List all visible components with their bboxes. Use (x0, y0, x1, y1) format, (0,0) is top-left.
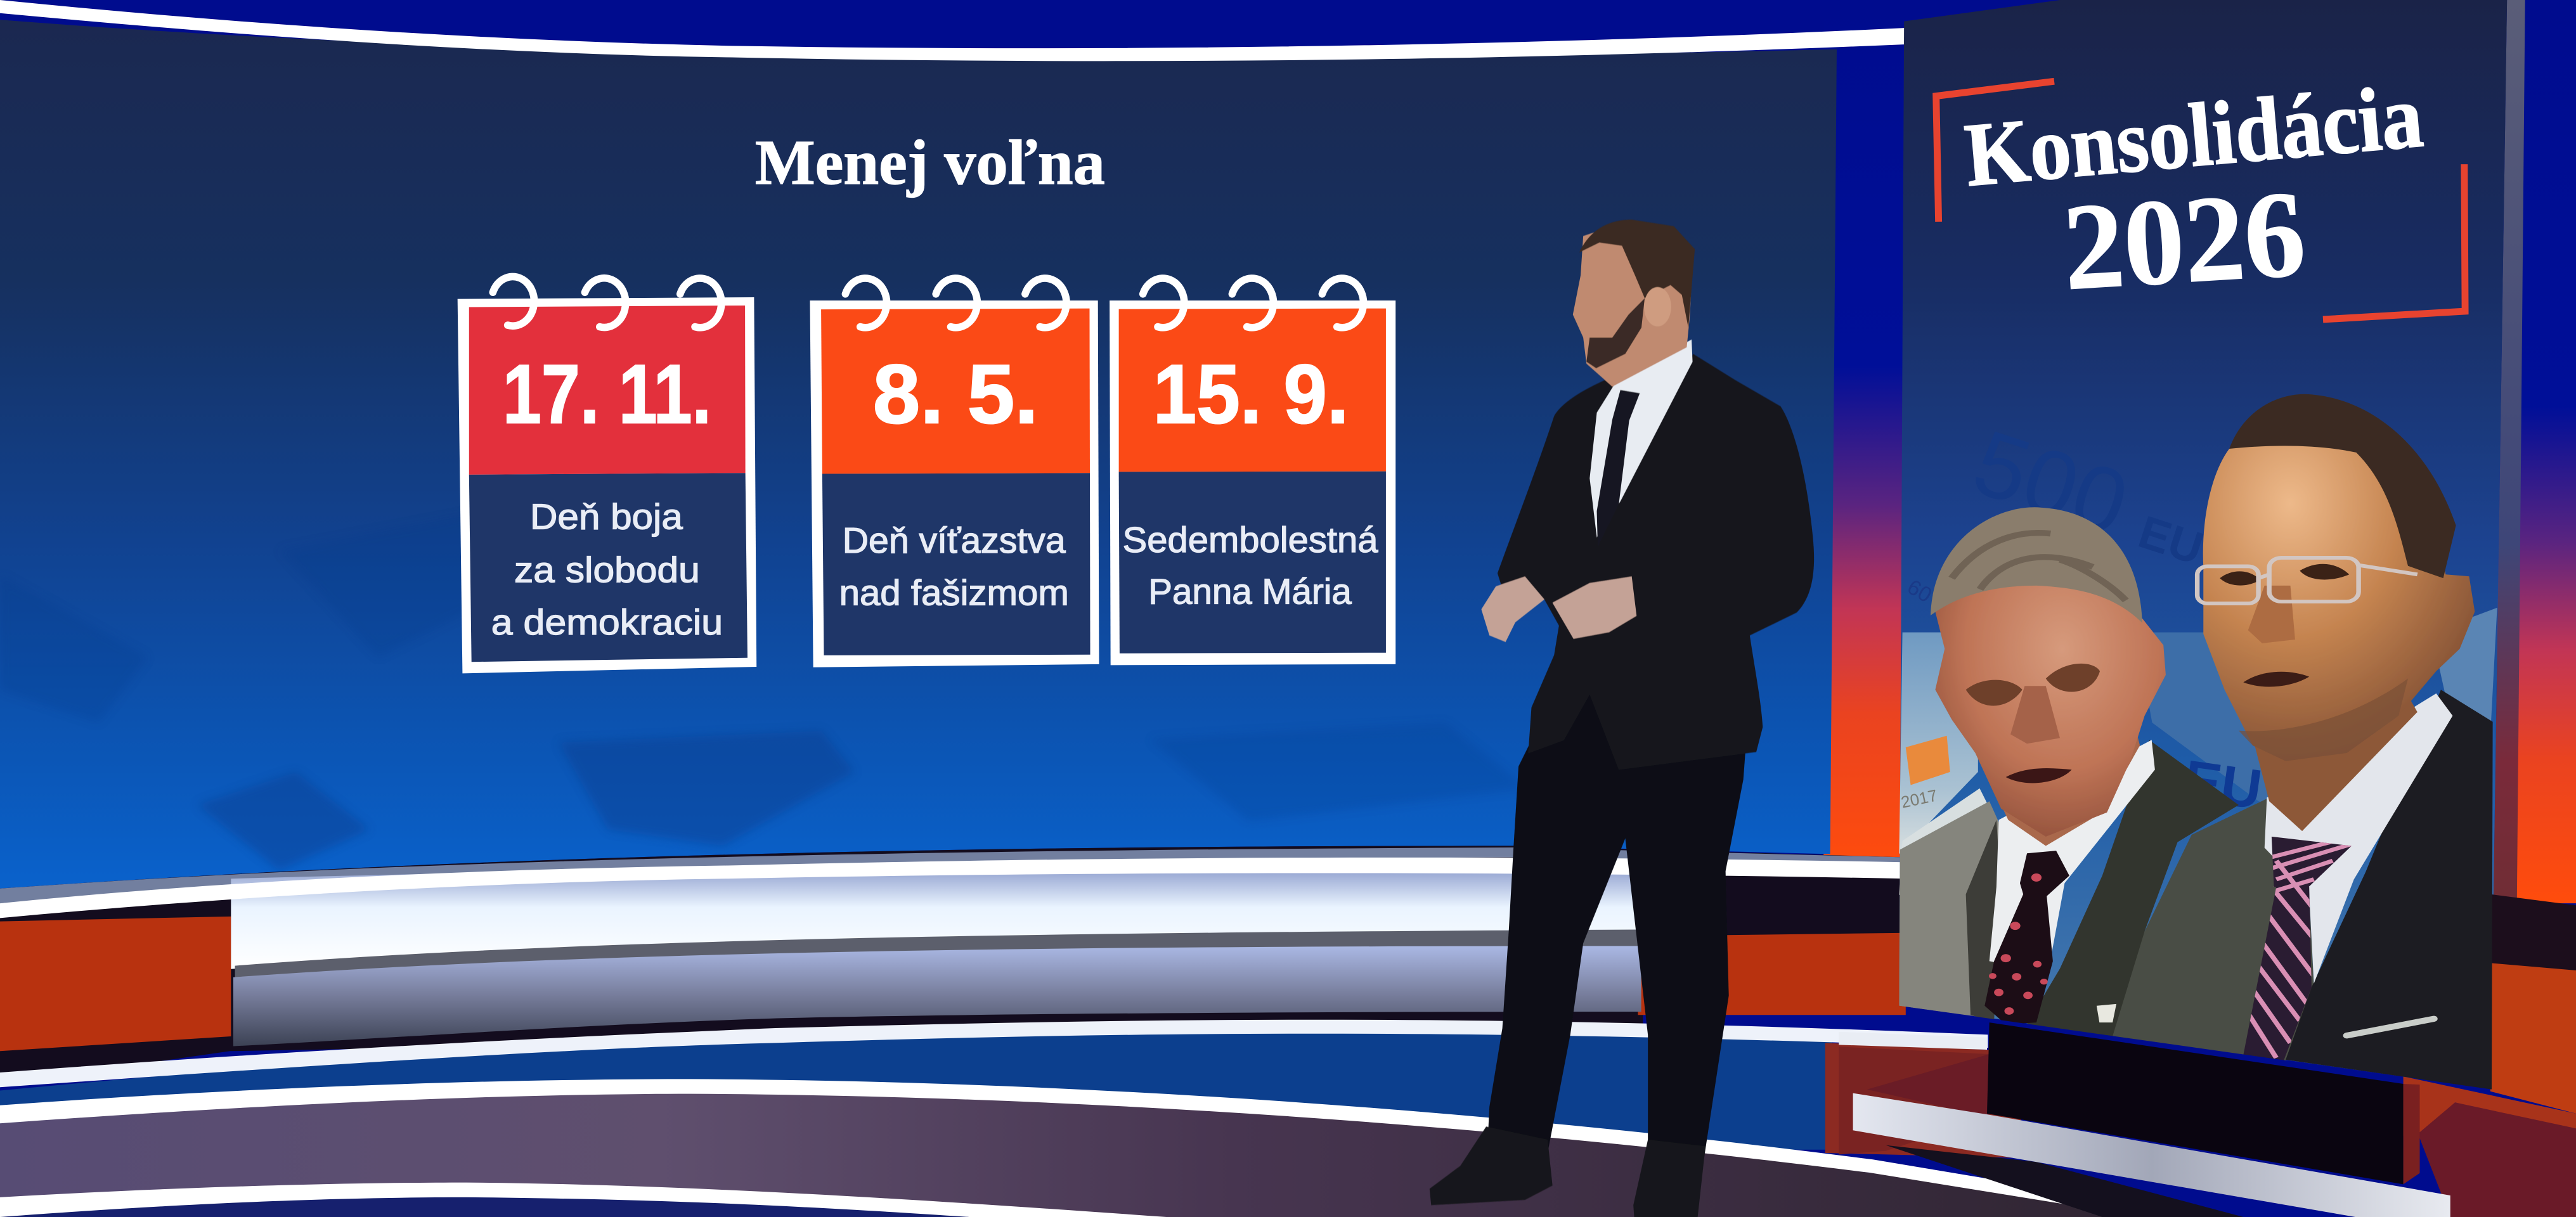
rings (493, 276, 722, 328)
white strip 2 (0, 1020, 1988, 1087)
nose shadow (2248, 586, 2295, 643)
lower light panel (233, 946, 1641, 1046)
description: Deň boja (530, 496, 683, 537)
white shirt (1990, 740, 2155, 972)
wine wall segment right (1825, 1043, 2021, 1158)
euro banknote background: 60 (1903, 576, 1936, 607)
upper light panel (231, 866, 1641, 969)
calendar card: 17. 11. (458, 276, 756, 673)
tie (1597, 390, 1640, 547)
description: Panna Mária (1148, 572, 1352, 612)
main video wall screen (0, 20, 1837, 889)
polka tie (1984, 851, 2069, 1024)
panel face (1899, 0, 2507, 1089)
neck (2255, 701, 2417, 832)
calendar card: 8. 5. (810, 278, 1099, 667)
date: 8. 5. (873, 347, 1039, 441)
white strip 3 (0, 1079, 2218, 1217)
lower circular inset (0, 1186, 1051, 1217)
description: Deň víťazstva (843, 520, 1066, 561)
description (839, 520, 1069, 614)
jaw stubble shade (2239, 679, 2408, 761)
rings (845, 278, 1066, 328)
banknote watermark on screen (0, 509, 1528, 870)
standing panel: Konsolidácia 2026 (1899, 0, 2525, 1089)
white shirt (2265, 693, 2452, 984)
red corner bracket top-left (1936, 81, 2054, 222)
blue lower wall (0, 1026, 1832, 1150)
beard (1586, 299, 1645, 368)
orange block left (0, 917, 231, 1051)
mouth (2243, 672, 2309, 686)
person portrait: left man (1899, 507, 2239, 1043)
striped tie (2239, 835, 2356, 1066)
description: nad fašizmom (839, 573, 1069, 614)
panel side edge (2490, 0, 2525, 1089)
face (2203, 430, 2475, 761)
calendar card: 15. 9. (1110, 278, 1395, 665)
eyes (2220, 564, 2349, 586)
person portrait: right man (2112, 394, 2495, 1090)
grey seam (235, 930, 1641, 979)
mouth (2006, 768, 2072, 783)
panel title line 2: 2026 (2059, 165, 2309, 316)
trousers (1488, 688, 1748, 1166)
white pedestal slab (1853, 1093, 2450, 1217)
description (1123, 520, 1378, 612)
euro banknote background: EU (2180, 748, 2265, 821)
description: za slobodu (514, 550, 700, 590)
euro banknote background: 2017 (1900, 787, 1939, 812)
pocket square (2347, 1019, 2434, 1036)
description: a demokraciu (491, 602, 723, 643)
orange block right (1638, 933, 1906, 1015)
ear (1644, 287, 1671, 326)
dark gap under slab (1886, 1145, 2243, 1217)
heading: Menej voľna: Menej voľna (755, 127, 1105, 198)
studio floor (0, 1090, 2201, 1217)
date: 17. 11. (503, 347, 711, 441)
date: 15. 9. (1153, 347, 1349, 441)
red corner bracket bottom-right (2323, 164, 2465, 319)
studio lower set: light panels and strips (0, 846, 2218, 1217)
right platform (2417, 1102, 2576, 1217)
left jacket panel (2112, 797, 2314, 1062)
face (1935, 586, 2166, 837)
hair (1579, 220, 1695, 328)
dark band under wall (0, 846, 1906, 1084)
hair (2229, 394, 2456, 578)
white strip 1 (0, 858, 1906, 918)
panel title line 1: Konsolidácia (1961, 65, 2426, 205)
glasses (2197, 558, 2417, 603)
suit jacket (1498, 354, 1814, 769)
euro banknote background (1899, 411, 2497, 895)
left platform (1839, 1046, 1990, 1154)
dark right jacket (2286, 690, 2495, 1090)
top white light strip (0, 0, 1906, 61)
grey jacket (1899, 801, 2001, 1017)
description (491, 496, 723, 643)
black pedestal column (1987, 1022, 2404, 1184)
hands (1481, 577, 1636, 642)
dark band behind panel, right (2490, 894, 2576, 972)
neck shadow (2003, 737, 2140, 846)
right-side studio set and pedestal (1839, 894, 2576, 1217)
neck and head (1573, 223, 1693, 387)
nose shadow (2010, 686, 2060, 744)
euro banknote background: EU (2133, 506, 2209, 575)
lapel pin (2097, 1004, 2116, 1022)
presenter (1430, 220, 1814, 1217)
left strip segment (1839, 1032, 1987, 1050)
description: Sedembolestná (1123, 520, 1378, 560)
shoes (1430, 1126, 1705, 1217)
hair (1931, 507, 2142, 623)
euro banknote background: 500 (1962, 411, 2140, 555)
shirt (1589, 340, 1693, 538)
white strip 4 (0, 1183, 1167, 1217)
rings (1143, 278, 1363, 328)
eyes and brows (1966, 664, 2100, 705)
